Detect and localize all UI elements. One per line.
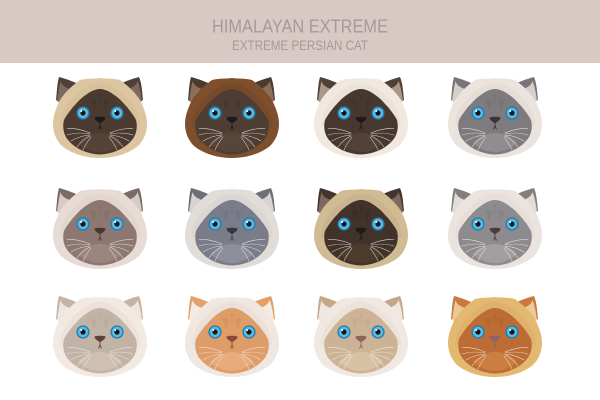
cat 1: seal point on cream xyxy=(53,77,147,158)
cat 7: seal point on tan xyxy=(314,188,408,269)
title: HIMALAYAN EXTREME xyxy=(212,16,388,36)
cat 10: orange flame point xyxy=(185,296,279,377)
cat 9: fawn point xyxy=(53,296,147,377)
cat 2: chocolate brown xyxy=(185,77,279,158)
subtitle: EXTREME PERSIAN CAT xyxy=(232,38,368,53)
cat 4: blue point xyxy=(448,77,542,158)
cat 11: cream tan point xyxy=(314,296,408,377)
cat 12: red golden xyxy=(448,296,542,377)
cat 8: grey point xyxy=(448,188,542,269)
cat 5: lilac taupe point xyxy=(53,188,147,269)
cat 6: grey blue point xyxy=(185,188,279,269)
header band xyxy=(0,0,600,63)
cat 3: seal point on white xyxy=(314,77,408,158)
